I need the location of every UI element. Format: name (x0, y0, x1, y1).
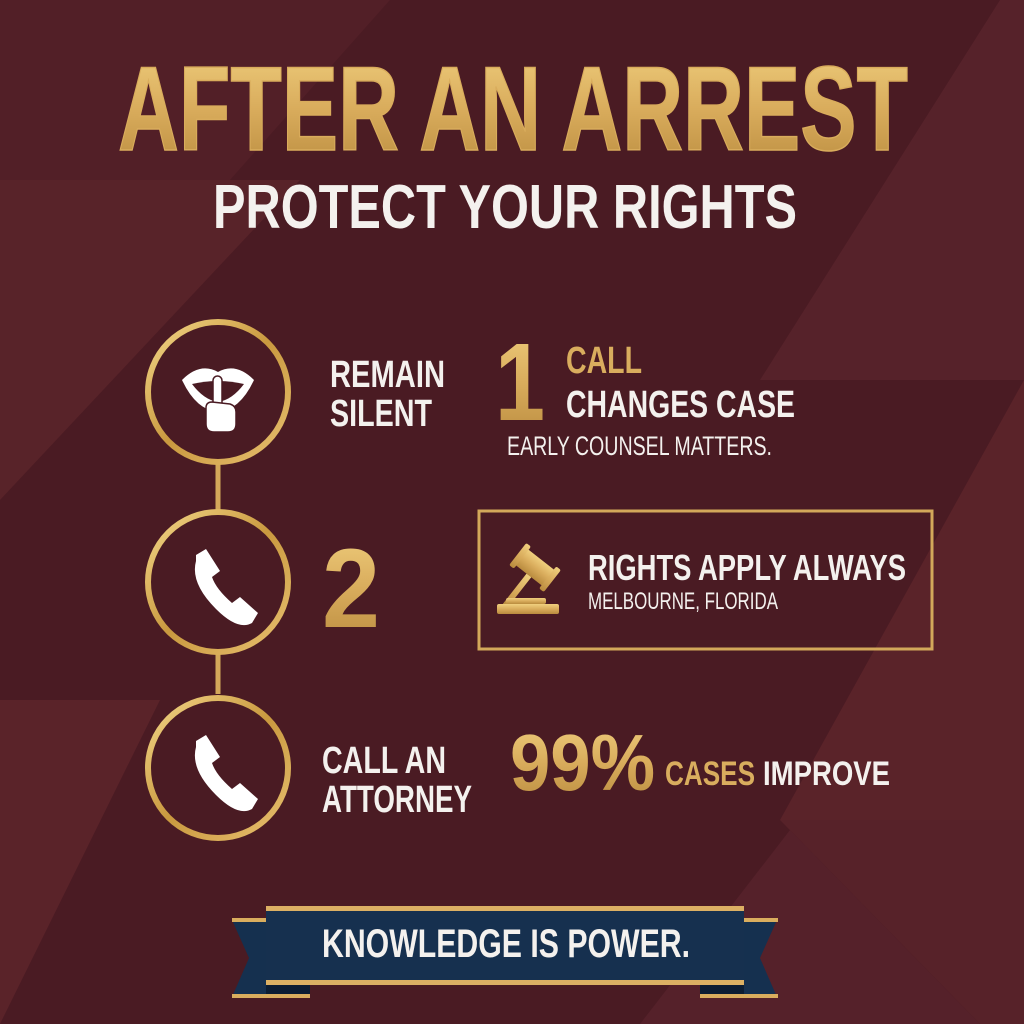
step 1 text: SILENT (330, 393, 432, 435)
stat: 99%: CASES (665, 755, 755, 793)
stat: 1 call: CHANGES CASE (566, 384, 795, 426)
stat: 1 call: EARLY COUNSEL MATTERS. (507, 431, 772, 461)
step 1 text (330, 354, 445, 435)
banner: KNOWLEDGE IS POWER. (322, 922, 690, 966)
number 2: 2 (322, 526, 380, 651)
panel: rights apply always: RIGHTS APPLY ALWAYS (588, 547, 906, 588)
stat: 1 call: CALL (566, 340, 642, 382)
stat: 1 call: 1 (495, 321, 545, 444)
icon: remain silent (148, 322, 288, 462)
subtitle: PROTECT YOUR RIGHTS (213, 173, 797, 242)
step 1 text: REMAIN (330, 354, 445, 396)
stat: 1 call (495, 321, 795, 461)
icon: phone 1 (148, 512, 288, 652)
icon: gavel (487, 543, 561, 620)
panel: rights apply always (479, 511, 932, 649)
step 3 text: ATTORNEY (322, 779, 472, 821)
banner (232, 906, 778, 998)
icon: phone 2 (148, 698, 288, 838)
stat: 99%: 99% (510, 718, 655, 807)
timeline connectors (216, 462, 220, 694)
step 3 text: CALL AN (322, 740, 446, 782)
step 3 text (322, 740, 472, 821)
stat: 99% (510, 718, 890, 807)
panel: rights apply always: MELBOURNE, FLORIDA (588, 588, 778, 615)
stat: 99%: IMPROVE (763, 755, 890, 793)
